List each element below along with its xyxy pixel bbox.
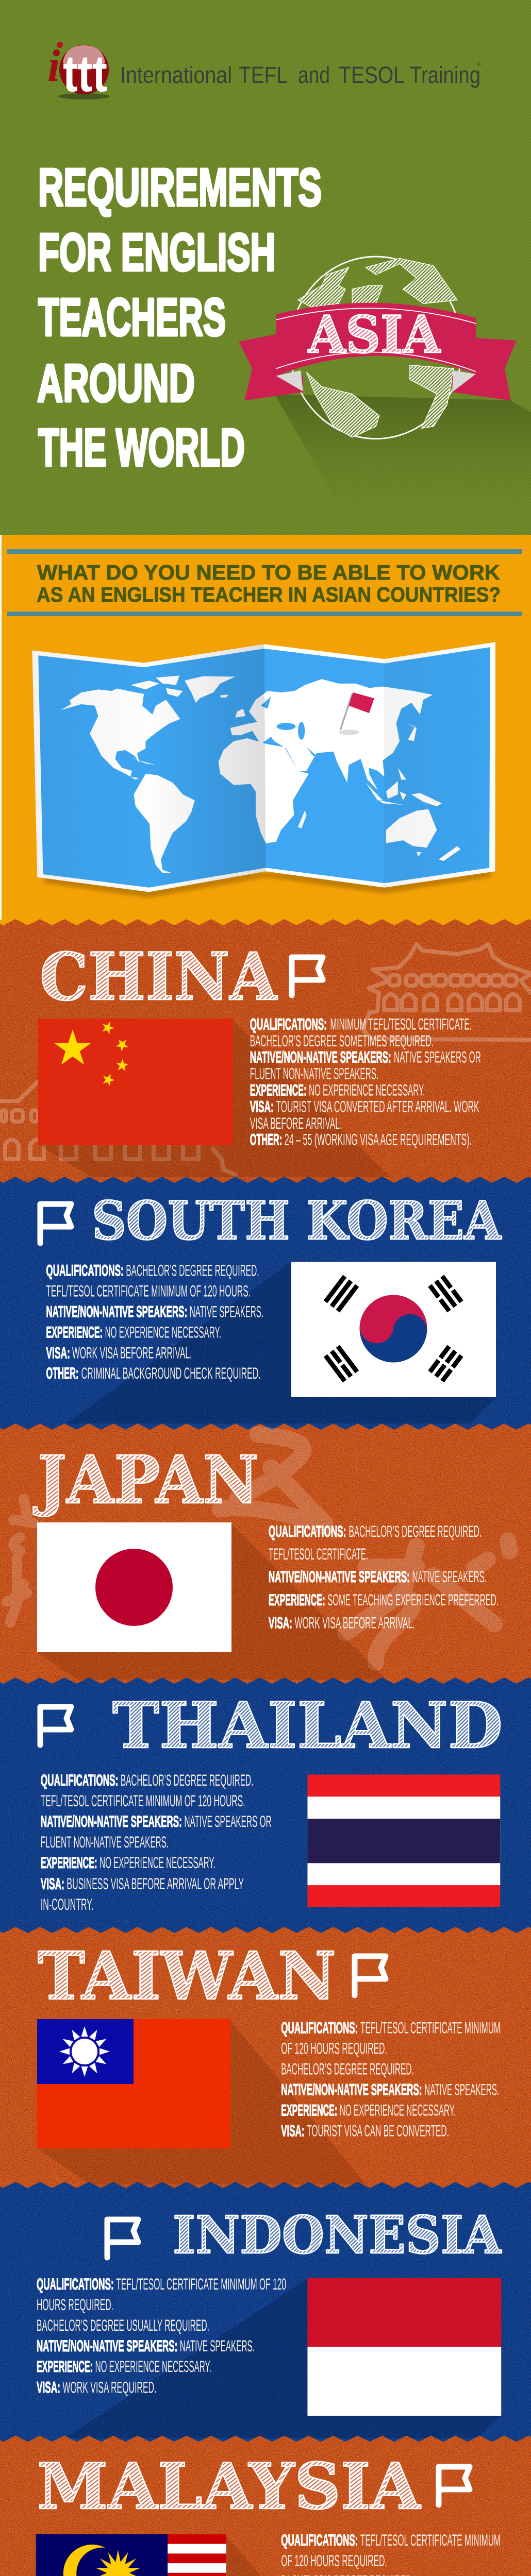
text: south korea requirements: WORK VISA BEFORE ARRIVAL. bbox=[72, 1344, 192, 1362]
logo wordmark bbox=[120, 62, 480, 88]
text: indonesia requirements: NO EXPERIENCE NECESSARY. bbox=[95, 2358, 211, 2376]
text: thailand requirements: NATIVE/NON-NATIVE SPEAKERS: bbox=[41, 1812, 182, 1831]
text: malaysia requirements: OF 120 HOURS REQUIRED. bbox=[281, 2552, 387, 2570]
text: thailand requirements bbox=[41, 1771, 272, 1913]
text: japan requirements: TEFL/TESOL CERTIFICATE. bbox=[269, 1545, 368, 1563]
text: south korea requirements: VISA: bbox=[46, 1344, 70, 1362]
text: china requirements: VISA BEFORE ARRIVAL. bbox=[250, 1114, 342, 1132]
panel: indonesia bbox=[0, 2182, 531, 2446]
heading: indonesia: INDONESIA bbox=[173, 2205, 502, 2265]
logo wordmark: International bbox=[120, 62, 232, 88]
text: south korea requirements: EXPERIENCE: bbox=[46, 1323, 103, 1342]
copyright mark: © bbox=[477, 62, 482, 67]
heading: question: WHAT DO YOU NEED TO BE ABLE TO WORK bbox=[37, 561, 500, 584]
text: indonesia requirements: HOURS REQUIRED. bbox=[37, 2296, 113, 2314]
text: south korea requirements: OTHER: bbox=[46, 1364, 78, 1382]
long shadow: indonesia flag bbox=[66, 2278, 501, 2438]
map fold shading bbox=[32, 642, 495, 892]
text: china requirements bbox=[250, 1015, 481, 1149]
panel: japan bbox=[0, 1423, 531, 1687]
flag: indonesia bbox=[307, 2278, 501, 2416]
icon: flag outline bbox=[355, 1956, 386, 1995]
icon: flag outline bbox=[292, 957, 323, 995]
divider bar top bbox=[7, 549, 522, 554]
icon: flag outline bbox=[439, 2467, 470, 2505]
logo wordmark: and bbox=[298, 62, 330, 88]
text: indonesia requirements: NATIVE SPEAKERS. bbox=[180, 2337, 255, 2355]
panel: taiwan bbox=[0, 1927, 531, 2191]
text: south korea requirements: BACHELOR’S DEGREE REQUIRED. bbox=[126, 1261, 259, 1280]
panel: china bbox=[0, 919, 531, 1183]
text: south korea requirements: NATIVE SPEAKERS. bbox=[190, 1302, 263, 1321]
text: japan requirements bbox=[269, 1522, 499, 1632]
heading: south korea: SOUTH KOREA bbox=[92, 1190, 502, 1252]
illustration: globe bbox=[290, 257, 462, 439]
text: south korea requirements: NATIVE/NON-NATIVE SPEAKERS: bbox=[46, 1302, 187, 1321]
text: south korea requirements bbox=[46, 1261, 263, 1382]
text: japan requirements: EXPERIENCE: bbox=[269, 1591, 325, 1609]
text: china requirements: NO EXPERIENCE NECESSARY. bbox=[309, 1081, 425, 1099]
heading: malaysia: MALAYSIA bbox=[37, 2450, 421, 2524]
text: taiwan requirements: BACHELOR’S DEGREE REQUIRED. bbox=[281, 2060, 414, 2078]
text: taiwan requirements: QUALIFICATIONS: bbox=[281, 2019, 358, 2037]
long shadow: japan flag bbox=[37, 1524, 387, 1680]
flag: taiwan bbox=[37, 2019, 230, 2148]
text: china requirements: NATIVE/NON-NATIVE SPEAKERS: bbox=[250, 1048, 391, 1066]
text: japan requirements: WORK VISA BEFORE ARRIVAL. bbox=[295, 1614, 415, 1632]
heading: taiwan: TAIWAN bbox=[38, 1938, 336, 2014]
logo wordmark: TESOL bbox=[339, 62, 405, 88]
title: THE WORLD bbox=[38, 418, 245, 477]
text: indonesia requirements: WORK VISA REQUIRED. bbox=[63, 2379, 156, 2397]
text: indonesia requirements: BACHELOR’S DEGREE USUALLY REQUIRED. bbox=[37, 2316, 209, 2334]
text: china requirements: FLUENT NON-NATIVE SPEAKERS. bbox=[250, 1065, 378, 1083]
text: thailand requirements: QUALIFICATIONS: bbox=[41, 1771, 118, 1789]
text: south korea requirements: NO EXPERIENCE NECESSARY. bbox=[105, 1323, 221, 1342]
text: malaysia requirements: QUALIFICATIONS: bbox=[281, 2531, 358, 2549]
divider bar bottom bbox=[7, 612, 522, 616]
text: thailand requirements: FLUENT NON-NATIVE SPEAKERS. bbox=[41, 1833, 169, 1851]
flag: south korea bbox=[291, 1262, 496, 1397]
text: japan requirements: QUALIFICATIONS: bbox=[269, 1522, 346, 1540]
long shadow: china flag bbox=[38, 1020, 390, 1177]
logo: ittt: i bbox=[47, 41, 60, 91]
text: china requirements: VISA: bbox=[250, 1098, 274, 1116]
panel: malaysia bbox=[0, 2436, 531, 2576]
logo wordmark: TEFL bbox=[239, 62, 288, 88]
flag: japan bbox=[37, 1522, 231, 1652]
map continents bbox=[60, 675, 460, 873]
text: indonesia requirements bbox=[37, 2275, 286, 2397]
heading: japan: JAPAN bbox=[33, 1442, 259, 1518]
icon: flag outline bbox=[40, 1707, 71, 1745]
flag: china bbox=[38, 1019, 233, 1145]
long shadow: ribbon bbox=[274, 394, 531, 507]
text: indonesia requirements: NATIVE/NON-NATIVE SPEAKERS: bbox=[37, 2337, 177, 2355]
text: malaysia requirements bbox=[281, 2531, 501, 2576]
text: china requirements: QUALIFICATIONS: bbox=[250, 1015, 327, 1033]
watermark: kana characters bbox=[7, 1434, 510, 1663]
title: REQUIREMENTS bbox=[38, 158, 322, 217]
text: south korea requirements: QUALIFICATIONS: bbox=[46, 1261, 124, 1280]
text: thailand requirements: IN-COUNTRY. bbox=[41, 1895, 93, 1913]
long shadow: korea flag bbox=[67, 1262, 496, 1423]
inland seas bbox=[261, 697, 317, 756]
text: thailand requirements: BUSINESS VISA BEFORE ARRIVAL OR APPLY bbox=[67, 1875, 244, 1893]
icon: flag outline bbox=[107, 2219, 138, 2258]
ribbon: asia: ASIA bbox=[308, 305, 441, 365]
illustration: folded world map bbox=[32, 642, 495, 898]
text: taiwan requirements bbox=[281, 2019, 501, 2140]
text: japan requirements: VISA: bbox=[269, 1614, 292, 1632]
text: thailand requirements: TEFL/TESOL CERTIFICATE MINIMUM OF 120 HOURS. bbox=[41, 1792, 245, 1810]
panel: thailand bbox=[0, 1677, 531, 1936]
text: china requirements: OTHER: bbox=[250, 1131, 282, 1149]
panel: south korea bbox=[0, 1177, 531, 1430]
text: indonesia requirements: TEFL/TESOL CERTIFICATE MINIMUM OF 120 bbox=[116, 2275, 286, 2293]
text: indonesia requirements: QUALIFICATIONS: bbox=[37, 2275, 114, 2293]
ribbon: asia bbox=[239, 303, 517, 400]
icon: flag outline bbox=[40, 1204, 71, 1243]
text: thailand requirements: EXPERIENCE: bbox=[41, 1854, 97, 1872]
title bbox=[37, 158, 322, 477]
flag: thailand bbox=[307, 1774, 500, 1907]
heading: thailand: THAILAND bbox=[112, 1689, 503, 1763]
flag: malaysia bbox=[36, 2534, 226, 2576]
text: taiwan requirements: NATIVE/NON-NATIVE SPEAKERS: bbox=[281, 2081, 422, 2099]
text: japan requirements: NATIVE/NON-NATIVE SPEAKERS: bbox=[269, 1568, 410, 1586]
text: taiwan requirements: OF 120 HOURS REQUIRED. bbox=[281, 2040, 387, 2058]
title: TEACHERS bbox=[38, 287, 226, 347]
text: indonesia requirements: VISA: bbox=[37, 2379, 60, 2397]
heading: question bbox=[37, 561, 501, 606]
text: china requirements: EXPERIENCE: bbox=[250, 1081, 306, 1099]
logo: ittt: ttt bbox=[63, 45, 107, 103]
panel: green header bbox=[0, 0, 531, 535]
logo: ittt bbox=[47, 41, 110, 103]
title: FOR ENGLISH bbox=[38, 223, 275, 282]
text: thailand requirements: NATIVE SPEAKERS OR bbox=[184, 1812, 272, 1831]
watermark: pagoda bbox=[0, 944, 531, 1175]
icon: map flag pin bbox=[339, 692, 374, 735]
heading: china: CHINA bbox=[40, 939, 278, 1015]
text: indonesia requirements: EXPERIENCE: bbox=[37, 2358, 93, 2376]
logo wordmark: Training bbox=[410, 62, 480, 88]
text: south korea requirements: TEFL/TESOL CERTIFICATE MINIMUM OF 120 HOURS. bbox=[46, 1282, 251, 1300]
text: thailand requirements: BACHELOR’S DEGREE REQUIRED. bbox=[121, 1771, 253, 1789]
text: south korea requirements: CRIMINAL BACKGROUND CHECK REQUIRED. bbox=[81, 1364, 261, 1382]
text: taiwan requirements: VISA: bbox=[281, 2122, 305, 2140]
text: taiwan requirements: EXPERIENCE: bbox=[281, 2102, 337, 2120]
text: thailand requirements: NO EXPERIENCE NECESSARY. bbox=[99, 1854, 215, 1872]
text: thailand requirements: VISA: bbox=[41, 1875, 64, 1893]
panel: map section bbox=[0, 535, 531, 927]
long shadow: taiwan flag bbox=[37, 2021, 366, 2184]
long shadow: malaysia flag bbox=[36, 2536, 356, 2576]
title: AROUND bbox=[37, 353, 195, 413]
